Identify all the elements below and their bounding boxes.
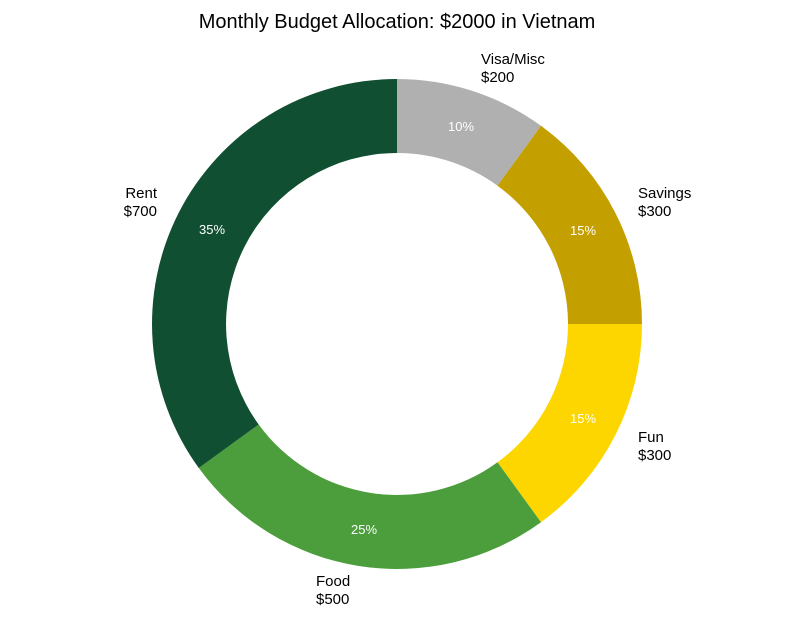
category labels: Visa/Misc [481, 51, 545, 68]
category labels: $200 [481, 69, 514, 86]
percent labels [199, 119, 596, 537]
percent labels: 15% [570, 223, 596, 238]
donut chart [152, 79, 642, 569]
category labels [124, 51, 691, 608]
slice: food [199, 424, 541, 569]
category labels: Food [316, 573, 350, 590]
slice: rent [152, 79, 397, 468]
category labels: $700 [124, 203, 157, 220]
percent labels: 35% [199, 222, 225, 237]
category labels: Rent [125, 185, 158, 202]
percent labels: 25% [351, 522, 377, 537]
slice: fun [498, 324, 642, 522]
percent labels: 10% [448, 119, 474, 134]
category labels: Fun [638, 429, 664, 446]
title: Monthly Budget Allocation: $2000 in Vietnam [199, 11, 595, 33]
percent labels: 15% [570, 411, 596, 426]
category labels: $300 [638, 203, 671, 220]
slice: savings [498, 126, 642, 324]
category labels: $300 [638, 447, 671, 464]
category labels: $500 [316, 591, 349, 608]
slice: visa/misc [397, 79, 541, 186]
category labels: Savings [638, 185, 691, 202]
